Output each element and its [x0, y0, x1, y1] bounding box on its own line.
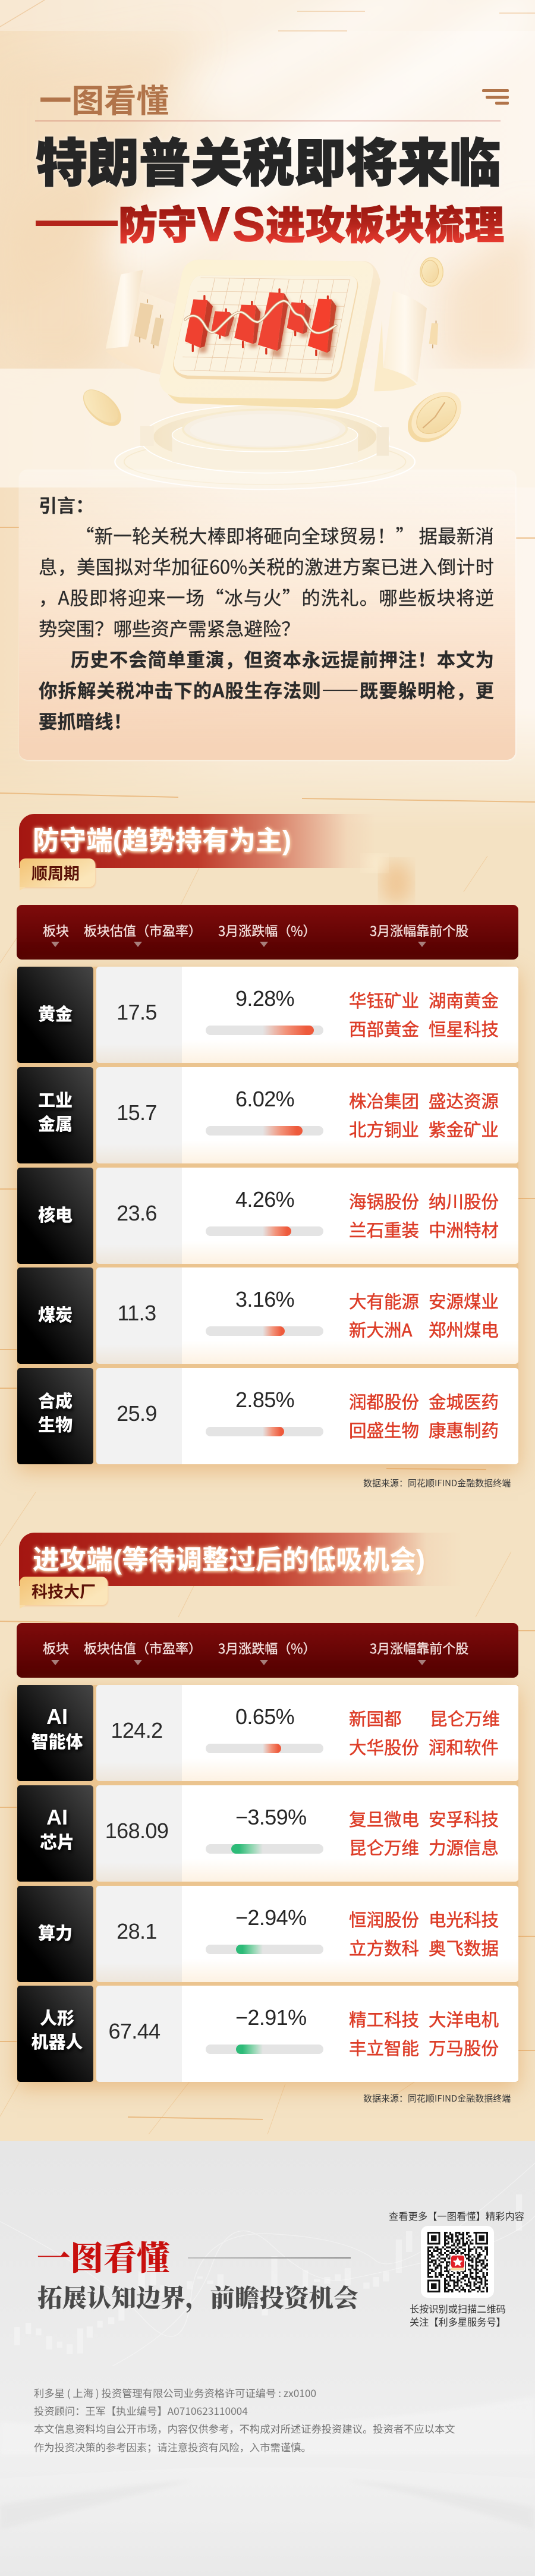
valuation: 28.1 — [117, 1919, 157, 1943]
valuation: 11.3 — [118, 1301, 156, 1325]
sector name: 生物 — [38, 1411, 73, 1436]
icon: 3D candlestick monitor on a pedestal with coins — [83, 257, 461, 490]
sector name — [17, 1785, 93, 1882]
valuation: 67.44 — [108, 2019, 160, 2043]
change and stocks — [182, 1168, 518, 1264]
valuation — [96, 1267, 182, 1364]
sector name: 金属 — [38, 1111, 73, 1136]
sector name — [17, 1067, 93, 1163]
legal disclaimer: 投资顾问：王军【执业编号】A0710623110004 — [34, 2403, 248, 2418]
change and stocks: 纳川股份 — [429, 1188, 499, 1213]
change and stocks: 丰立智能 — [349, 2035, 419, 2060]
intro paragraph: 息，美国拟对华加征60%关税的激进方案已进入倒计时 — [39, 553, 494, 580]
change and stocks: 恒润股份 — [349, 1907, 419, 1932]
change and stocks: 4.26% — [235, 1187, 294, 1212]
change and stocks: 万马股份 — [429, 2035, 499, 2060]
row: 人形机器人 — [17, 1986, 518, 2082]
chart grid — [180, 278, 350, 374]
sector name — [17, 967, 93, 1063]
sector name — [17, 1685, 93, 1781]
change and stocks: 大洋电机 — [429, 2006, 499, 2031]
table header: 进攻端: 板块估值（市盈率） — [84, 1638, 202, 1657]
intro paragraph: ，A股即将迎来一场“冰与火”的洗礼。哪些板块将逆 — [39, 584, 494, 611]
footer brand: 一图看懂: 一图看懂 — [37, 2232, 170, 2280]
change and stocks: 安孚科技 — [429, 1806, 499, 1831]
valuation: 15.7 — [117, 1100, 157, 1125]
QR caption top: 查看更多【一图看懂】精彩内容 — [389, 2209, 524, 2223]
table header: 进攻端: 3月涨跌幅（%） — [218, 1638, 316, 1657]
valuation — [96, 1067, 182, 1163]
legal disclaimer: 作为投资决策的参考因素；请注意投资有风险，入市需谨慎。 — [34, 2439, 311, 2454]
sector name — [17, 1168, 93, 1264]
table header: 防守端: 3月涨跌幅（%） — [218, 921, 316, 940]
valuation — [96, 1368, 182, 1464]
change and stocks: 润和软件 — [429, 1734, 499, 1759]
valuation — [96, 1168, 182, 1264]
valuation — [96, 1986, 182, 2082]
tag: 顺周期 — [20, 858, 95, 887]
change and stocks: 中洲特材 — [429, 1217, 499, 1242]
valuation: 124.2 — [111, 1718, 163, 1743]
tag: 顺周期: 顺周期 — [32, 861, 80, 884]
table header: 进攻端: 3月涨幅靠前个股 — [370, 1638, 468, 1657]
change and stocks: −2.91% — [235, 2005, 307, 2030]
row: AI智能体 — [17, 1685, 518, 1781]
intro paragraph: 要抓暗线！ — [39, 707, 132, 734]
change and stocks: 润都股份 — [349, 1389, 419, 1414]
row: 合成生物 — [17, 1368, 518, 1464]
sector name: 智能体 — [31, 1728, 83, 1753]
tag: 科技大厂 — [20, 1577, 108, 1605]
valuation: 168.09 — [105, 1819, 168, 1843]
change and stocks — [182, 1785, 518, 1882]
section heading: 进攻端: 进攻端(等待调整过后的低吸机会) — [33, 1538, 425, 1577]
change and stocks: 新国都 — [349, 1706, 402, 1731]
right ribbon — [374, 320, 417, 391]
left ribbon — [106, 291, 175, 375]
subtitle — [36, 196, 504, 250]
valuation — [96, 1685, 182, 1781]
change and stocks: 西部黄金 — [349, 1016, 419, 1041]
tag: 科技大厂: 科技大厂 — [32, 1579, 96, 1602]
change and stocks: 力源信息 — [429, 1835, 499, 1860]
sector name: 算力 — [38, 1920, 73, 1945]
sector name: 人形 — [40, 2005, 74, 2030]
valuation: 25.9 — [117, 1401, 157, 1426]
sector name: 机器人 — [31, 2028, 83, 2053]
change and stocks: 2.85% — [235, 1388, 294, 1412]
heading label: 一图看懂: 一图看懂 — [39, 75, 169, 122]
table header: 防守端 — [17, 905, 518, 960]
footer slogan: 拓展认知边界，前瞻投资机会 — [37, 2278, 358, 2314]
panel: intro card — [19, 470, 515, 760]
valuation — [96, 967, 182, 1063]
sector name — [17, 1886, 93, 1982]
coins — [420, 257, 443, 286]
sector name — [17, 1267, 93, 1364]
change and stocks — [182, 1368, 518, 1464]
table header: 进攻端: 板块 — [43, 1638, 69, 1657]
intro paragraph: “新一轮关税大棒即将砸向全球贸易！” 据最新消 — [75, 522, 494, 549]
legal disclaimer: 本文信息资料均自公开市场，内容仅供参考，不构成对所述证券投资建议。投资者不应以本文 — [34, 2421, 455, 2436]
change and stocks: 6.02% — [235, 1087, 294, 1111]
legal disclaimer — [34, 2385, 455, 2454]
valuation: 23.6 — [117, 1201, 157, 1225]
change and stocks — [182, 1067, 518, 1163]
data source: 数据来源：同花顺IFIND金融数据终端 — [363, 1477, 511, 1489]
row: 工业金属 — [17, 1067, 518, 1163]
row: 算力 — [17, 1886, 518, 1982]
change and stocks: 北方铜业 — [349, 1116, 419, 1141]
change and stocks: 昆仑万维 — [349, 1835, 419, 1860]
QR caption bottom: 长按识别或扫描二维码 — [410, 2301, 506, 2316]
sector name: 煤炭 — [38, 1301, 73, 1326]
change and stocks: 海锅股份 — [349, 1188, 419, 1213]
change and stocks: 康惠制药 — [429, 1417, 499, 1442]
table header: 防守端: 3月涨幅靠前个股 — [370, 921, 468, 940]
sector name — [17, 1986, 93, 2082]
change and stocks: 恒星科技 — [429, 1016, 499, 1041]
valuation: 17.5 — [117, 1000, 157, 1024]
sector name: 核电 — [38, 1201, 73, 1226]
sector name: 合成 — [38, 1388, 73, 1413]
change and stocks: 兰石重装 — [349, 1217, 419, 1242]
change and stocks: 金城医药 — [429, 1389, 499, 1414]
row: 核电 — [17, 1168, 518, 1264]
table header: 防守端: 板块 — [43, 921, 69, 940]
panel: footer background — [0, 2141, 535, 2576]
candlesticks — [199, 295, 338, 358]
change and stocks — [182, 1267, 518, 1364]
change and stocks: 电光科技 — [429, 1907, 499, 1932]
change and stocks: 3.16% — [235, 1287, 294, 1311]
change and stocks: 大有能源 — [349, 1288, 419, 1313]
change and stocks: 大华股份 — [349, 1734, 419, 1759]
change and stocks: 株冶集团 — [349, 1088, 419, 1113]
data source: 数据来源：同花顺IFIND金融数据终端 — [363, 2092, 511, 2105]
change and stocks: 立方数科 — [349, 1935, 419, 1960]
sector name: AI — [46, 1805, 68, 1829]
change and stocks: −2.94% — [235, 1905, 307, 1930]
section header band: 防守端 — [19, 814, 376, 868]
table header: 防守端: 板块估值（市盈率） — [84, 921, 202, 940]
change and stocks — [182, 967, 518, 1063]
QR caption bottom: 关注【利多星服务号】 — [410, 2314, 506, 2329]
intro heading: 引言： — [39, 491, 94, 518]
intro paragraph: 历史不会简单重演，但资本永远提前押注！本文为 — [71, 646, 494, 672]
change and stocks: 郑州煤电 — [429, 1317, 499, 1342]
row: 黄金 — [17, 967, 518, 1063]
sector name: AI — [46, 1704, 68, 1729]
sector name: 芯片 — [40, 1829, 74, 1854]
QR caption bottom — [410, 2301, 506, 2329]
change and stocks: 湖南黄金 — [429, 987, 499, 1012]
change and stocks: 精工科技 — [349, 2006, 419, 2031]
section heading: 防守端: 防守端(趋势持有为主) — [33, 819, 291, 857]
title: 特朗普关税即将来临 — [36, 122, 501, 197]
change and stocks: 回盛生物 — [349, 1417, 419, 1442]
valuation — [96, 1785, 182, 1882]
change and stocks: 0.65% — [235, 1704, 294, 1729]
pedestal — [115, 434, 415, 489]
change and stocks: 安源煤业 — [429, 1288, 499, 1313]
sector name — [17, 1368, 93, 1464]
change and stocks — [182, 1986, 518, 2082]
change and stocks: 盛达资源 — [429, 1088, 499, 1113]
row: 煤炭 — [17, 1267, 518, 1364]
monitor body — [159, 260, 380, 408]
intro paragraph: 势突围？哪些资产需紧急避险？ — [39, 615, 300, 641]
section header band: 进攻端 — [19, 1533, 462, 1586]
intro paragraph — [39, 522, 494, 734]
change and stocks: 新大洲A — [349, 1317, 412, 1342]
icon: menu bars — [482, 89, 509, 105]
sector name: 工业 — [38, 1087, 73, 1112]
change and stocks: 华钰矿业 — [349, 987, 419, 1012]
valuation — [96, 1886, 182, 1982]
change and stocks: 紫金矿业 — [429, 1116, 499, 1141]
row: AI芯片 — [17, 1785, 518, 1882]
change and stocks — [182, 1685, 518, 1781]
table header: 进攻端 — [17, 1623, 518, 1678]
change and stocks: 昆仑万维 — [430, 1706, 500, 1731]
QR code — [421, 2226, 494, 2298]
change and stocks: 奥飞数据 — [429, 1935, 499, 1960]
change and stocks — [182, 1886, 518, 1982]
legal disclaimer: 利多星 ( 上海 ) 投资管理有限公司业务资格许可证编号 : zx0100 — [34, 2385, 316, 2400]
change and stocks: 复旦微电 — [349, 1806, 419, 1831]
change and stocks: −3.59% — [235, 1805, 307, 1829]
trend line — [185, 301, 336, 333]
sector name: 黄金 — [38, 1001, 73, 1026]
intro paragraph: 你拆解关税冲击下的A股生存法则——既要躲明枪，更 — [39, 677, 494, 703]
change and stocks: 9.28% — [235, 986, 294, 1011]
